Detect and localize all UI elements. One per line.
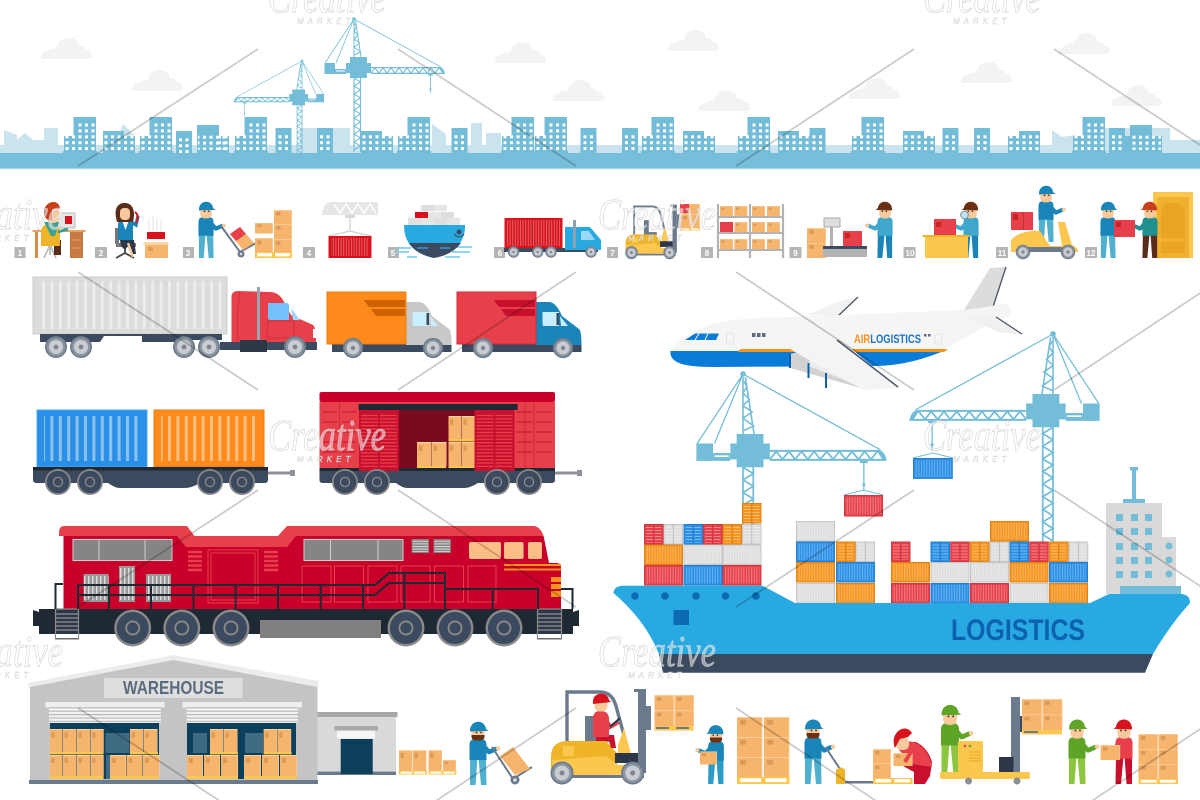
tower crane large skyline: [324, 17, 445, 152]
tall pallet stack: [737, 717, 790, 784]
red delivery truck: [457, 292, 582, 358]
container stack middle: [796, 521, 875, 604]
plane far wing: [807, 297, 858, 316]
ship bridge tower: [1106, 467, 1181, 594]
icon 5: small cargo ship: [388, 205, 472, 258]
seated driver: [593, 694, 620, 748]
icon 11: courier on scooter: [996, 186, 1078, 259]
plane near wing: [778, 337, 899, 390]
icon 10: inspector with magnifier: 10: [906, 249, 915, 258]
icon 9: worker at scale: 9: [793, 249, 798, 258]
icon 11: courier on scooter: 11: [998, 249, 1007, 258]
worker carrying box: [695, 725, 724, 784]
handrails: [56, 573, 572, 609]
icon 6: container truck: [494, 218, 601, 258]
semi truck with trailer: [33, 277, 317, 358]
loco windows and grilles: [73, 539, 561, 603]
skyline buildings: [63, 117, 1162, 156]
hanging blue container: [913, 453, 953, 479]
deck and buffers: [33, 609, 579, 639]
port crane left: [696, 371, 887, 584]
cargo ship group: [613, 331, 1190, 673]
watermark text: MARKET: [628, 671, 685, 680]
icon 12: parcel handover at door: 12: [1087, 249, 1096, 258]
green worker with stacker: [940, 697, 1062, 784]
plane fuselage: [670, 304, 1011, 367]
plane blue belly: [670, 350, 946, 367]
watermark text: MARKET: [297, 455, 354, 464]
stacked boxes and bending worker: [873, 729, 932, 784]
icon 4: container hanging from gantry: 4: [307, 249, 312, 258]
icon 2: receptionist on the phone: 2: [99, 249, 104, 258]
trailer: [33, 277, 227, 334]
icon 1: office worker at desk: [14, 202, 86, 258]
cab: [232, 287, 316, 352]
warehouse left bay: [46, 702, 164, 779]
warehouse annex: [318, 712, 398, 775]
icon 3: worker with hand truck: [183, 202, 292, 258]
watermark text: Creative: [598, 190, 716, 239]
plane tail fin: [964, 267, 1006, 310]
plane tailplane: [966, 317, 1023, 335]
loco wheels: [114, 610, 522, 646]
green and red workers exchanging box: [1068, 719, 1132, 784]
container stack bow: [644, 503, 762, 586]
container stack aft: [891, 521, 1088, 604]
port crane right: [909, 331, 1100, 544]
plane cockpit windows: [685, 334, 719, 340]
warehouse building: [28, 655, 398, 784]
icon 3: worker with hand truck: 3: [186, 249, 191, 258]
warehouse sign: WAREHOUSE: [123, 678, 224, 698]
worker with pallet jack: [804, 719, 875, 784]
icon 8: warehouse shelving: [701, 204, 784, 258]
air cargo plane: [670, 267, 1023, 390]
ground band: [0, 153, 1200, 169]
icon 12: parcel handover at door: [1085, 192, 1193, 258]
icon 7: small forklift: [607, 204, 700, 259]
orange container: [154, 410, 264, 467]
icon 1: office worker at desk: 1: [18, 249, 23, 258]
icon 7: small forklift: 7: [610, 249, 615, 258]
plane livery text: AIRLOGISTICS: [854, 332, 921, 346]
orange delivery truck: [327, 292, 452, 358]
warehouse right bay: [182, 702, 302, 779]
ship hull: [613, 586, 1190, 673]
watermark text: MARKET: [953, 17, 1010, 26]
worker pushing hand truck: [470, 722, 532, 785]
watermark text: Creative: [268, 411, 386, 460]
blue container: [37, 410, 147, 467]
watermark text: Creative: [598, 627, 716, 676]
watermark text: Creative: [923, 411, 1041, 460]
clouds: [41, 30, 1162, 111]
icon 10: inspector with magnifier: [904, 202, 979, 258]
icon 5: small cargo ship: 5: [391, 249, 396, 258]
watermark text: MARKET: [297, 17, 354, 26]
icon 8: warehouse shelving: 8: [705, 249, 710, 258]
cargo boxes: [417, 416, 475, 468]
flat wagon with two containers: [33, 410, 295, 495]
red box car: [320, 392, 582, 495]
pallet stack right: [1138, 734, 1178, 784]
tower crane small skyline: [234, 60, 324, 161]
watermark text: MARKET: [953, 455, 1010, 464]
hanging red container: [844, 490, 883, 517]
watermark text: MARKET: [628, 234, 685, 243]
icon 2: receptionist on the phone: [95, 203, 168, 258]
big forklift with seated driver: [550, 689, 694, 785]
row of twelve numbered process icons: [14, 186, 1193, 259]
icon 9: worker at scale: [790, 202, 893, 258]
skyline background silhouettes: [0, 123, 1200, 153]
watermark text: [0, 0, 1041, 680]
icon 6: container truck: 6: [498, 249, 503, 258]
diesel locomotive: [33, 526, 579, 646]
boxes beside warehouse: [399, 750, 456, 774]
icon 4: container hanging from gantry: [303, 202, 378, 258]
ship hull: LOGISTICS: [951, 614, 1085, 647]
